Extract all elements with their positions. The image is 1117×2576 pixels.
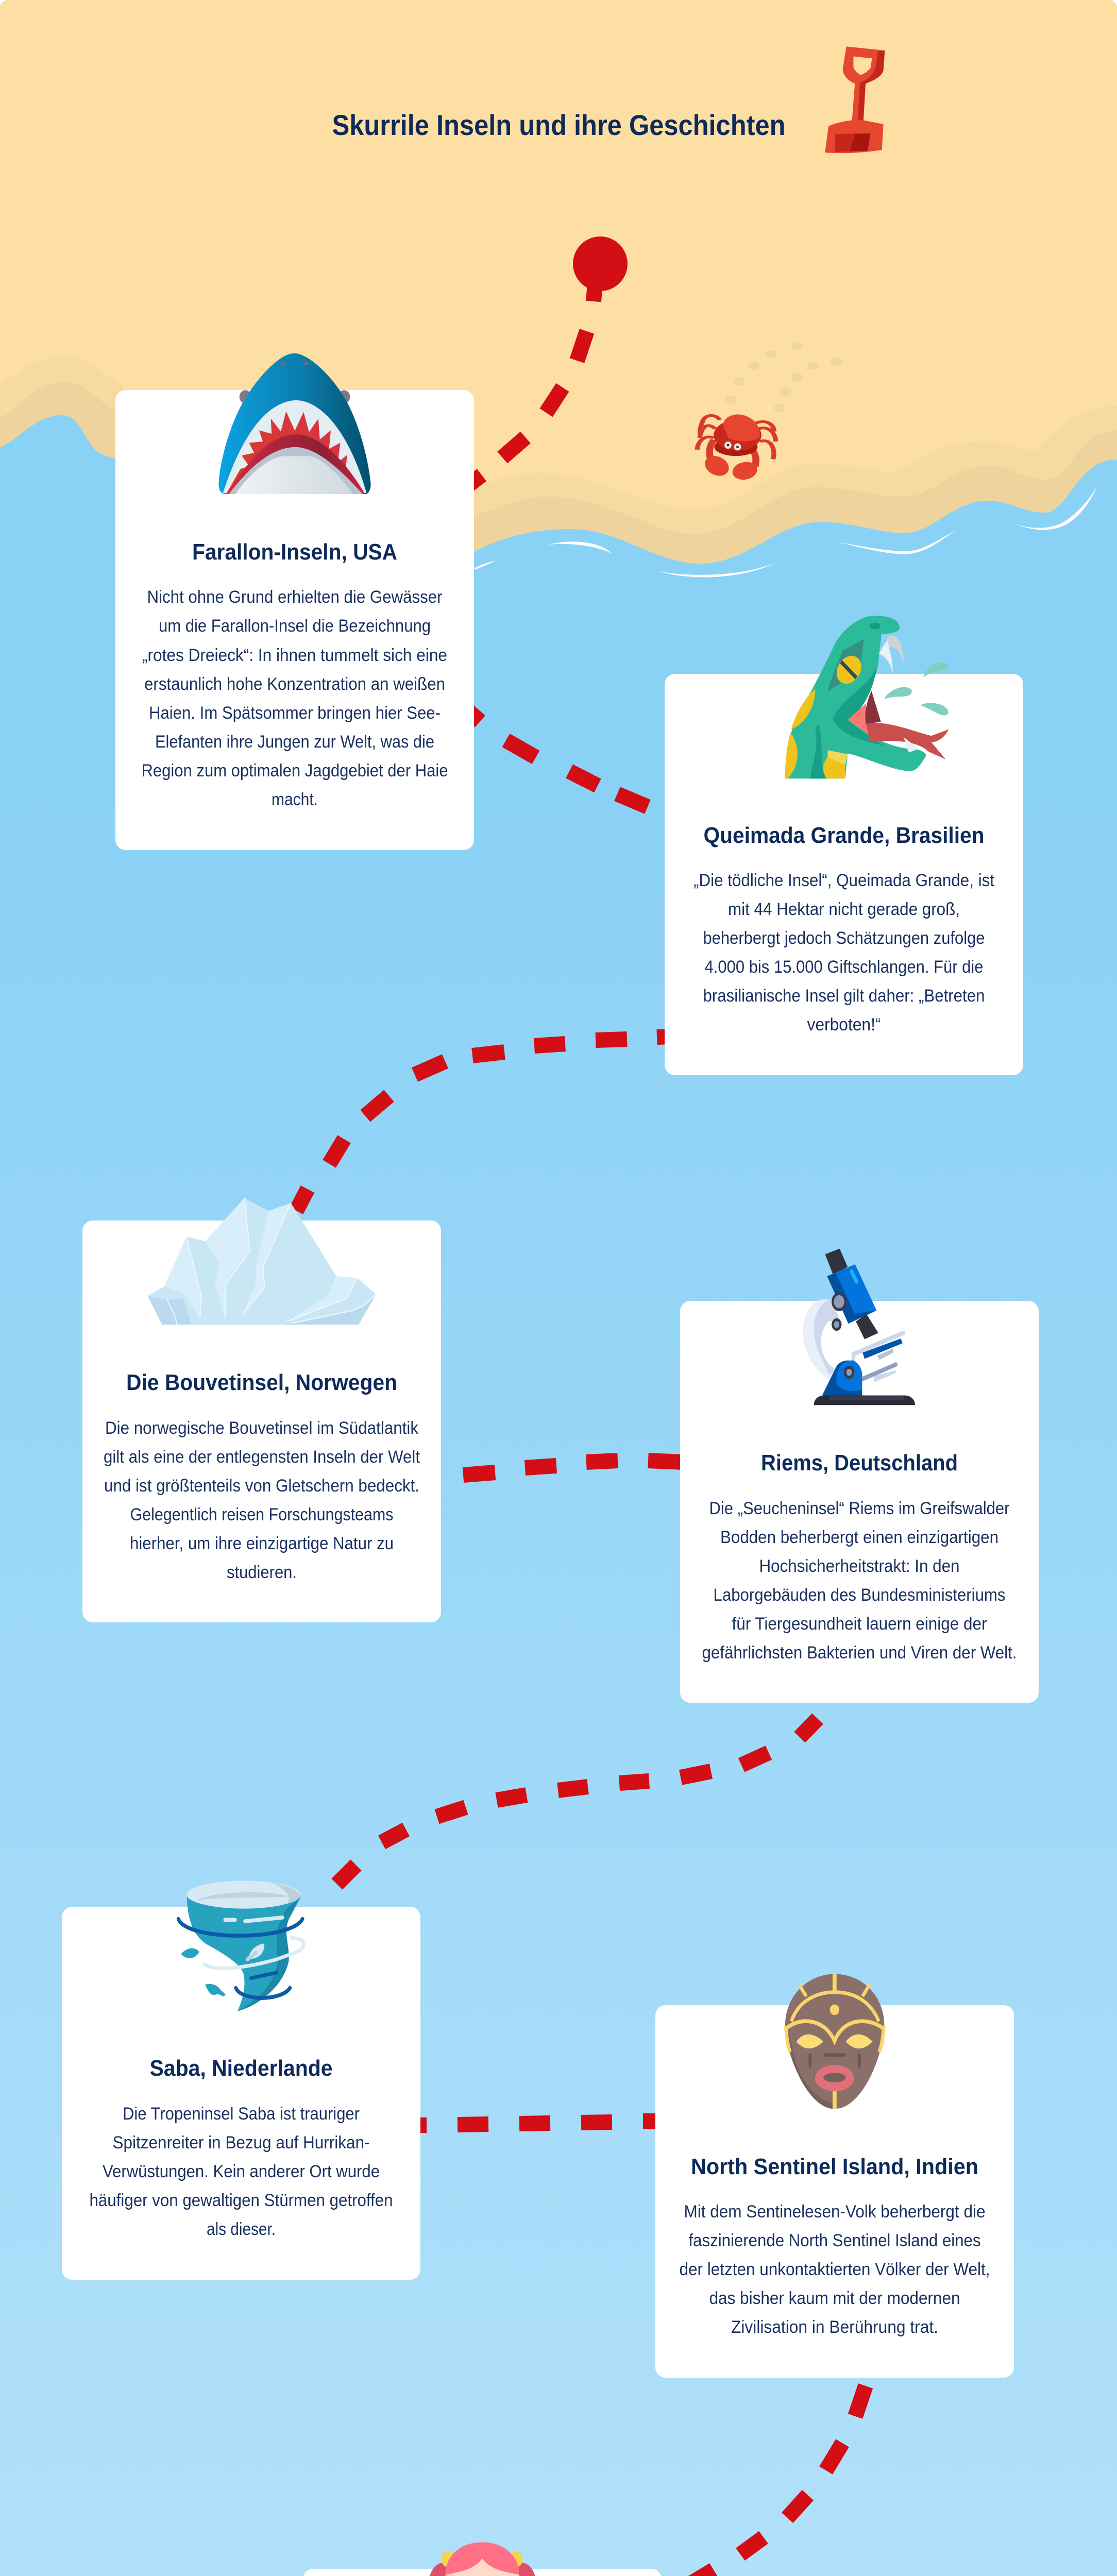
card text: Zivilisation in Berührung trat. — [731, 2317, 938, 2337]
panel: Bouvetinsel — [82, 1198, 441, 1622]
card text: gefährlichsten Bakterien und Viren der Welt. — [702, 1643, 1017, 1663]
card background — [680, 1301, 1039, 1703]
card heading: North Sentinel Island, Indien — [691, 2154, 978, 2179]
card background — [82, 1221, 441, 1622]
card text: Die norwegische Bouvetinsel im Südatlantik — [105, 1418, 419, 1438]
card text: Haien. Im Spätsommer bringen hier See- — [149, 703, 441, 723]
card text: um die Farallon-Insel die Bezeichnung — [159, 616, 431, 636]
card background — [115, 390, 474, 850]
panel: Queimada Grande — [665, 616, 1023, 1075]
card text: studieren. — [227, 1563, 297, 1582]
route: Farallon to Queimada — [464, 707, 648, 807]
route: Bouvet to Riems — [463, 1461, 683, 1475]
card text: faszinierende North Sentinel Island eines — [688, 2231, 981, 2250]
card text: 4.000 bis 15.000 Giftschlangen. Für die — [705, 957, 983, 977]
icon: crab — [697, 414, 776, 481]
card text — [679, 2202, 990, 2337]
card text: Die „Seucheninsel“ Riems im Greifswalder — [709, 1499, 1010, 1518]
icon: snake — [785, 616, 949, 778]
route: North Sentinel to Muñecas — [683, 2386, 866, 2576]
card text: beherbergt jedoch Schätzungen zufolge — [703, 928, 985, 948]
dashed treasure route — [296, 236, 866, 2576]
card text — [90, 2104, 393, 2239]
panel: Saba — [62, 1880, 420, 2280]
card heading: Farallon-Inseln, USA — [192, 539, 397, 565]
icon: tribal mask — [785, 1974, 884, 2109]
card text: „rotes Dreieck“: In ihnen tummelt sich eine — [142, 646, 447, 665]
white wave lines — [475, 486, 1097, 577]
card text: Hochsicherheitstrakt: In den — [759, 1556, 959, 1576]
card text: Mit dem Sentinelesen-Volk beherbergt die — [684, 2202, 985, 2222]
card text: mit 44 Hektar nicht gerade groß, — [728, 900, 960, 919]
card text: der letzten unkontaktierten Völker der Welt, — [679, 2260, 990, 2279]
card text: Elefanten ihre Jungen zur Welt, was die — [155, 732, 434, 752]
card text: als dieser. — [207, 2219, 276, 2239]
card text: Gelegentlich reisen Forschungsteams — [130, 1505, 394, 1524]
card text — [104, 1418, 420, 1582]
card text: Bodden beherbergt einen einzigartigen — [720, 1528, 998, 1547]
card background — [62, 1907, 420, 2280]
card text: für Tiergesundheit lauern einige der — [732, 1614, 987, 1634]
card text: brasilianische Insel gilt daher: „Betreten — [703, 986, 985, 1006]
card text — [693, 871, 995, 1035]
card text: Region zum optimalen Jagdgebiet der Haie — [141, 761, 448, 781]
icon: microscope — [803, 1249, 915, 1405]
card heading: Queimada Grande, Brasilien — [704, 823, 984, 848]
icon: shark — [218, 353, 371, 494]
card text — [141, 587, 448, 809]
route start marker — [573, 236, 628, 291]
icon: tornado — [178, 1880, 304, 2011]
route: Saba to North Sentinel — [417, 2121, 659, 2125]
card text: gilt als eine der entlegensten Inseln der Welt — [104, 1447, 420, 1467]
card text: hierher, um ihre einzigartige Natur zu — [130, 1534, 394, 1553]
crab footprints — [725, 342, 842, 412]
card background — [303, 2569, 662, 2576]
route: Queimada to Bouvet — [296, 1037, 670, 1211]
card text: macht. — [272, 790, 318, 809]
icon: red shovel — [825, 46, 885, 153]
card background — [665, 674, 1023, 1075]
card text: das bisher kaum mit der modernen — [709, 2289, 960, 2308]
card heading: Saba, Niederlande — [149, 2056, 333, 2081]
card text — [702, 1499, 1017, 1663]
card text: „Die tödliche Insel“, Queimada Grande, ist — [693, 871, 995, 890]
card text: Verwüstungen. Kein anderer Ort wurde — [103, 2162, 380, 2181]
card text: häufiger von gewaltigen Stürmen getroffen — [90, 2191, 393, 2210]
card text: Spitzenreiter in Bezug auf Hurrikan- — [112, 2133, 370, 2153]
card text: Die Tropeninsel Saba ist trauriger — [123, 2104, 360, 2124]
icon: iceberg — [147, 1198, 376, 1325]
panel: Farallon-Inseln — [115, 353, 474, 850]
card heading: Die Bouvetinsel, Norwegen — [126, 1370, 397, 1395]
background: beach — [0, 0, 1117, 564]
title: Skurrile Inseln und ihre Geschichten — [332, 109, 785, 141]
card text: erstaunlich hohe Konzentration an weißen — [144, 674, 445, 694]
icon: doll — [429, 2543, 536, 2576]
card text: Nicht ohne Grund erhielten die Gewässer — [147, 587, 442, 607]
panel: North Sentinel Island — [655, 1974, 1014, 2378]
card text: und ist größtenteils von Gletschern bedeckt. — [104, 1476, 419, 1496]
card background — [655, 2005, 1014, 2378]
panel: Riems — [680, 1249, 1039, 1703]
route: Riems to Saba — [337, 1719, 818, 1884]
card heading: Riems, Deutschland — [761, 1450, 958, 1476]
card text: Laborgebäuden des Bundesministeriums — [713, 1585, 1006, 1605]
card text: verboten!“ — [807, 1015, 881, 1035]
route: start to Farallon — [466, 283, 595, 487]
panel: Isla de las Muñecas — [303, 2543, 662, 2576]
